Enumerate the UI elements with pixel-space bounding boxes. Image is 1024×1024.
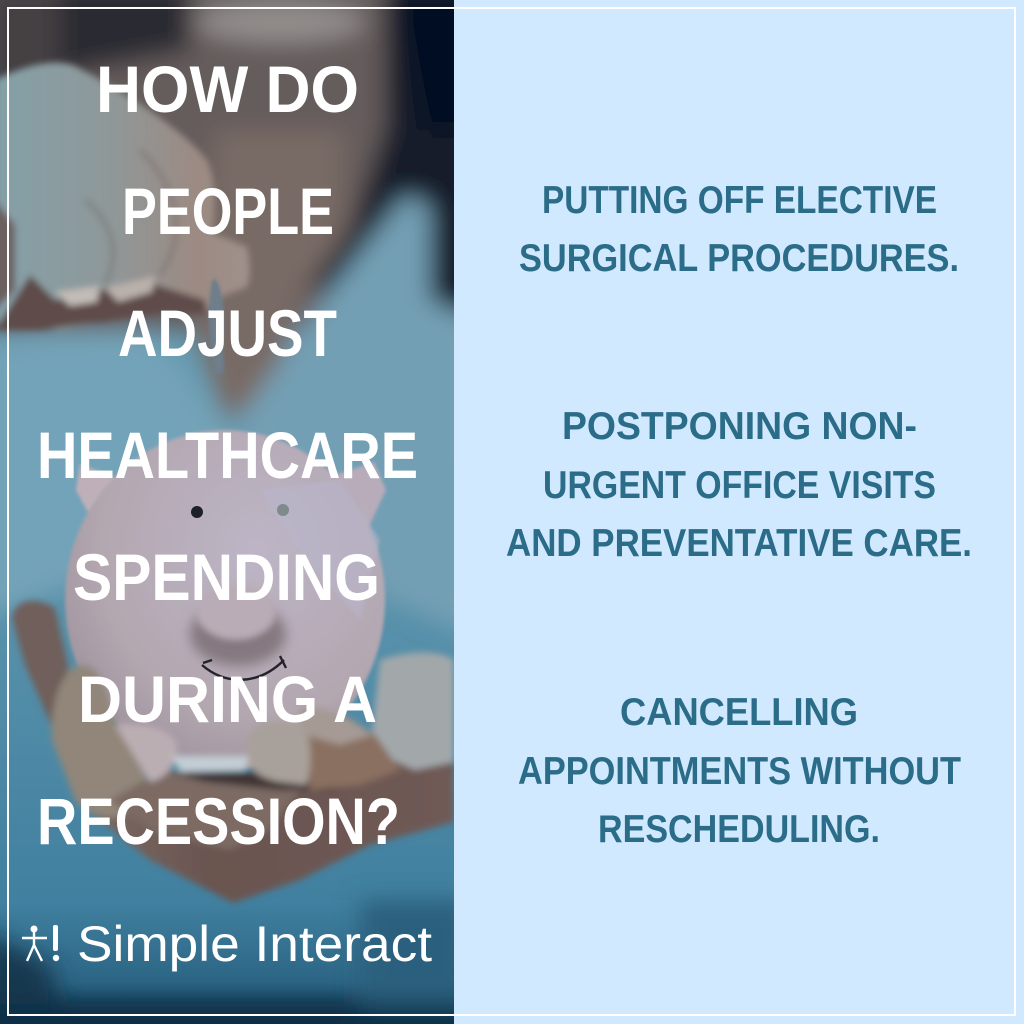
logo: Simple Interact	[22, 916, 432, 972]
text block: cancelling appointments: CANCELLING	[620, 691, 858, 734]
icon: stick figure with exclamation mark	[22, 925, 59, 961]
text block: cancelling appointments: RESCHEDULING.	[598, 808, 880, 851]
lower hand holding the piggy bank	[12, 601, 454, 903]
upper hand holding the coin	[0, 63, 250, 330]
text block: non-urgent office visits: AND PREVENTATIVE CARE.	[506, 522, 972, 565]
text block: non-urgent office visits: POSTPONING NON-	[562, 405, 917, 448]
title: HOW DO	[96, 52, 359, 126]
title: RECESSION?	[37, 784, 400, 858]
panel: healthcare spending adjustments	[506, 179, 972, 851]
text block: cancelling appointments	[518, 691, 961, 851]
icon: coin	[209, 278, 224, 374]
text block: cancelling appointments: APPOINTMENTS WITHOUT	[518, 750, 961, 793]
photo: hand dropping coin into piggy bank	[0, 0, 480, 1024]
title: HEALTHCARE	[37, 418, 418, 492]
text block: elective surgical procedures	[519, 179, 959, 280]
wordmark: Simple Interact	[77, 916, 432, 972]
title: ADJUST	[118, 296, 337, 370]
text block: non-urgent office visits: URGENT OFFICE VISITS	[543, 464, 936, 507]
piggy bank	[65, 430, 386, 770]
title: PEOPLE	[122, 174, 334, 248]
text block: elective surgical procedures: PUTTING OFF ELECTIVE	[542, 179, 937, 222]
title: DURING A	[78, 662, 377, 736]
right panel background	[454, 0, 1024, 1024]
text block: non-urgent office visits	[506, 405, 972, 565]
title: SPENDING	[73, 540, 380, 614]
title	[37, 52, 418, 858]
text block: elective surgical procedures: SURGICAL PROCEDURES.	[519, 237, 959, 280]
